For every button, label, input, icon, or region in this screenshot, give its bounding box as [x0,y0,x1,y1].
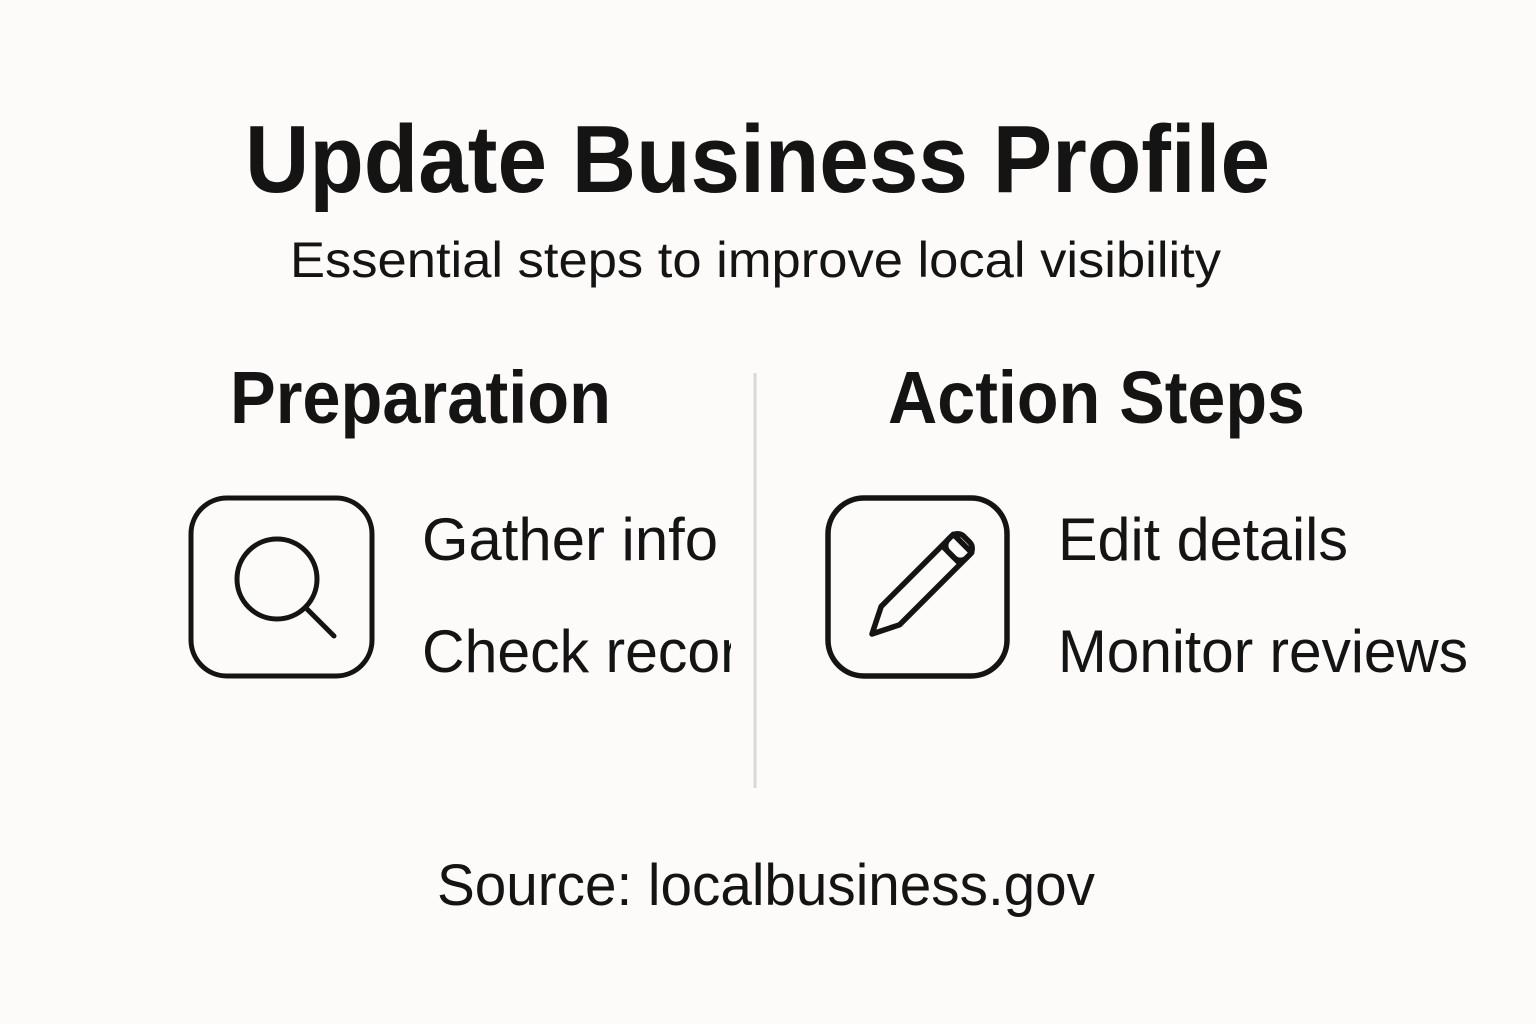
text: Monitor reviews: Monitor reviews [1058,618,1468,685]
text: Check records: Check records [422,618,802,685]
panel: action steps [828,356,1468,685]
icon: pencil [828,498,1007,676]
text: Gather info: Gather info [422,506,718,573]
panel: preparation [188,369,731,678]
text: Edit details: Edit details [1058,506,1348,573]
subtitle: Essential steps to improve local visibility [290,232,1221,288]
icon: magnifier [191,498,372,676]
heading: Preparation: Preparation [230,356,611,439]
source: Source: localbusiness.gov [437,853,1095,918]
title: Update Business Profile [245,106,1270,213]
heading: Action Steps: Action Steps [888,356,1305,439]
